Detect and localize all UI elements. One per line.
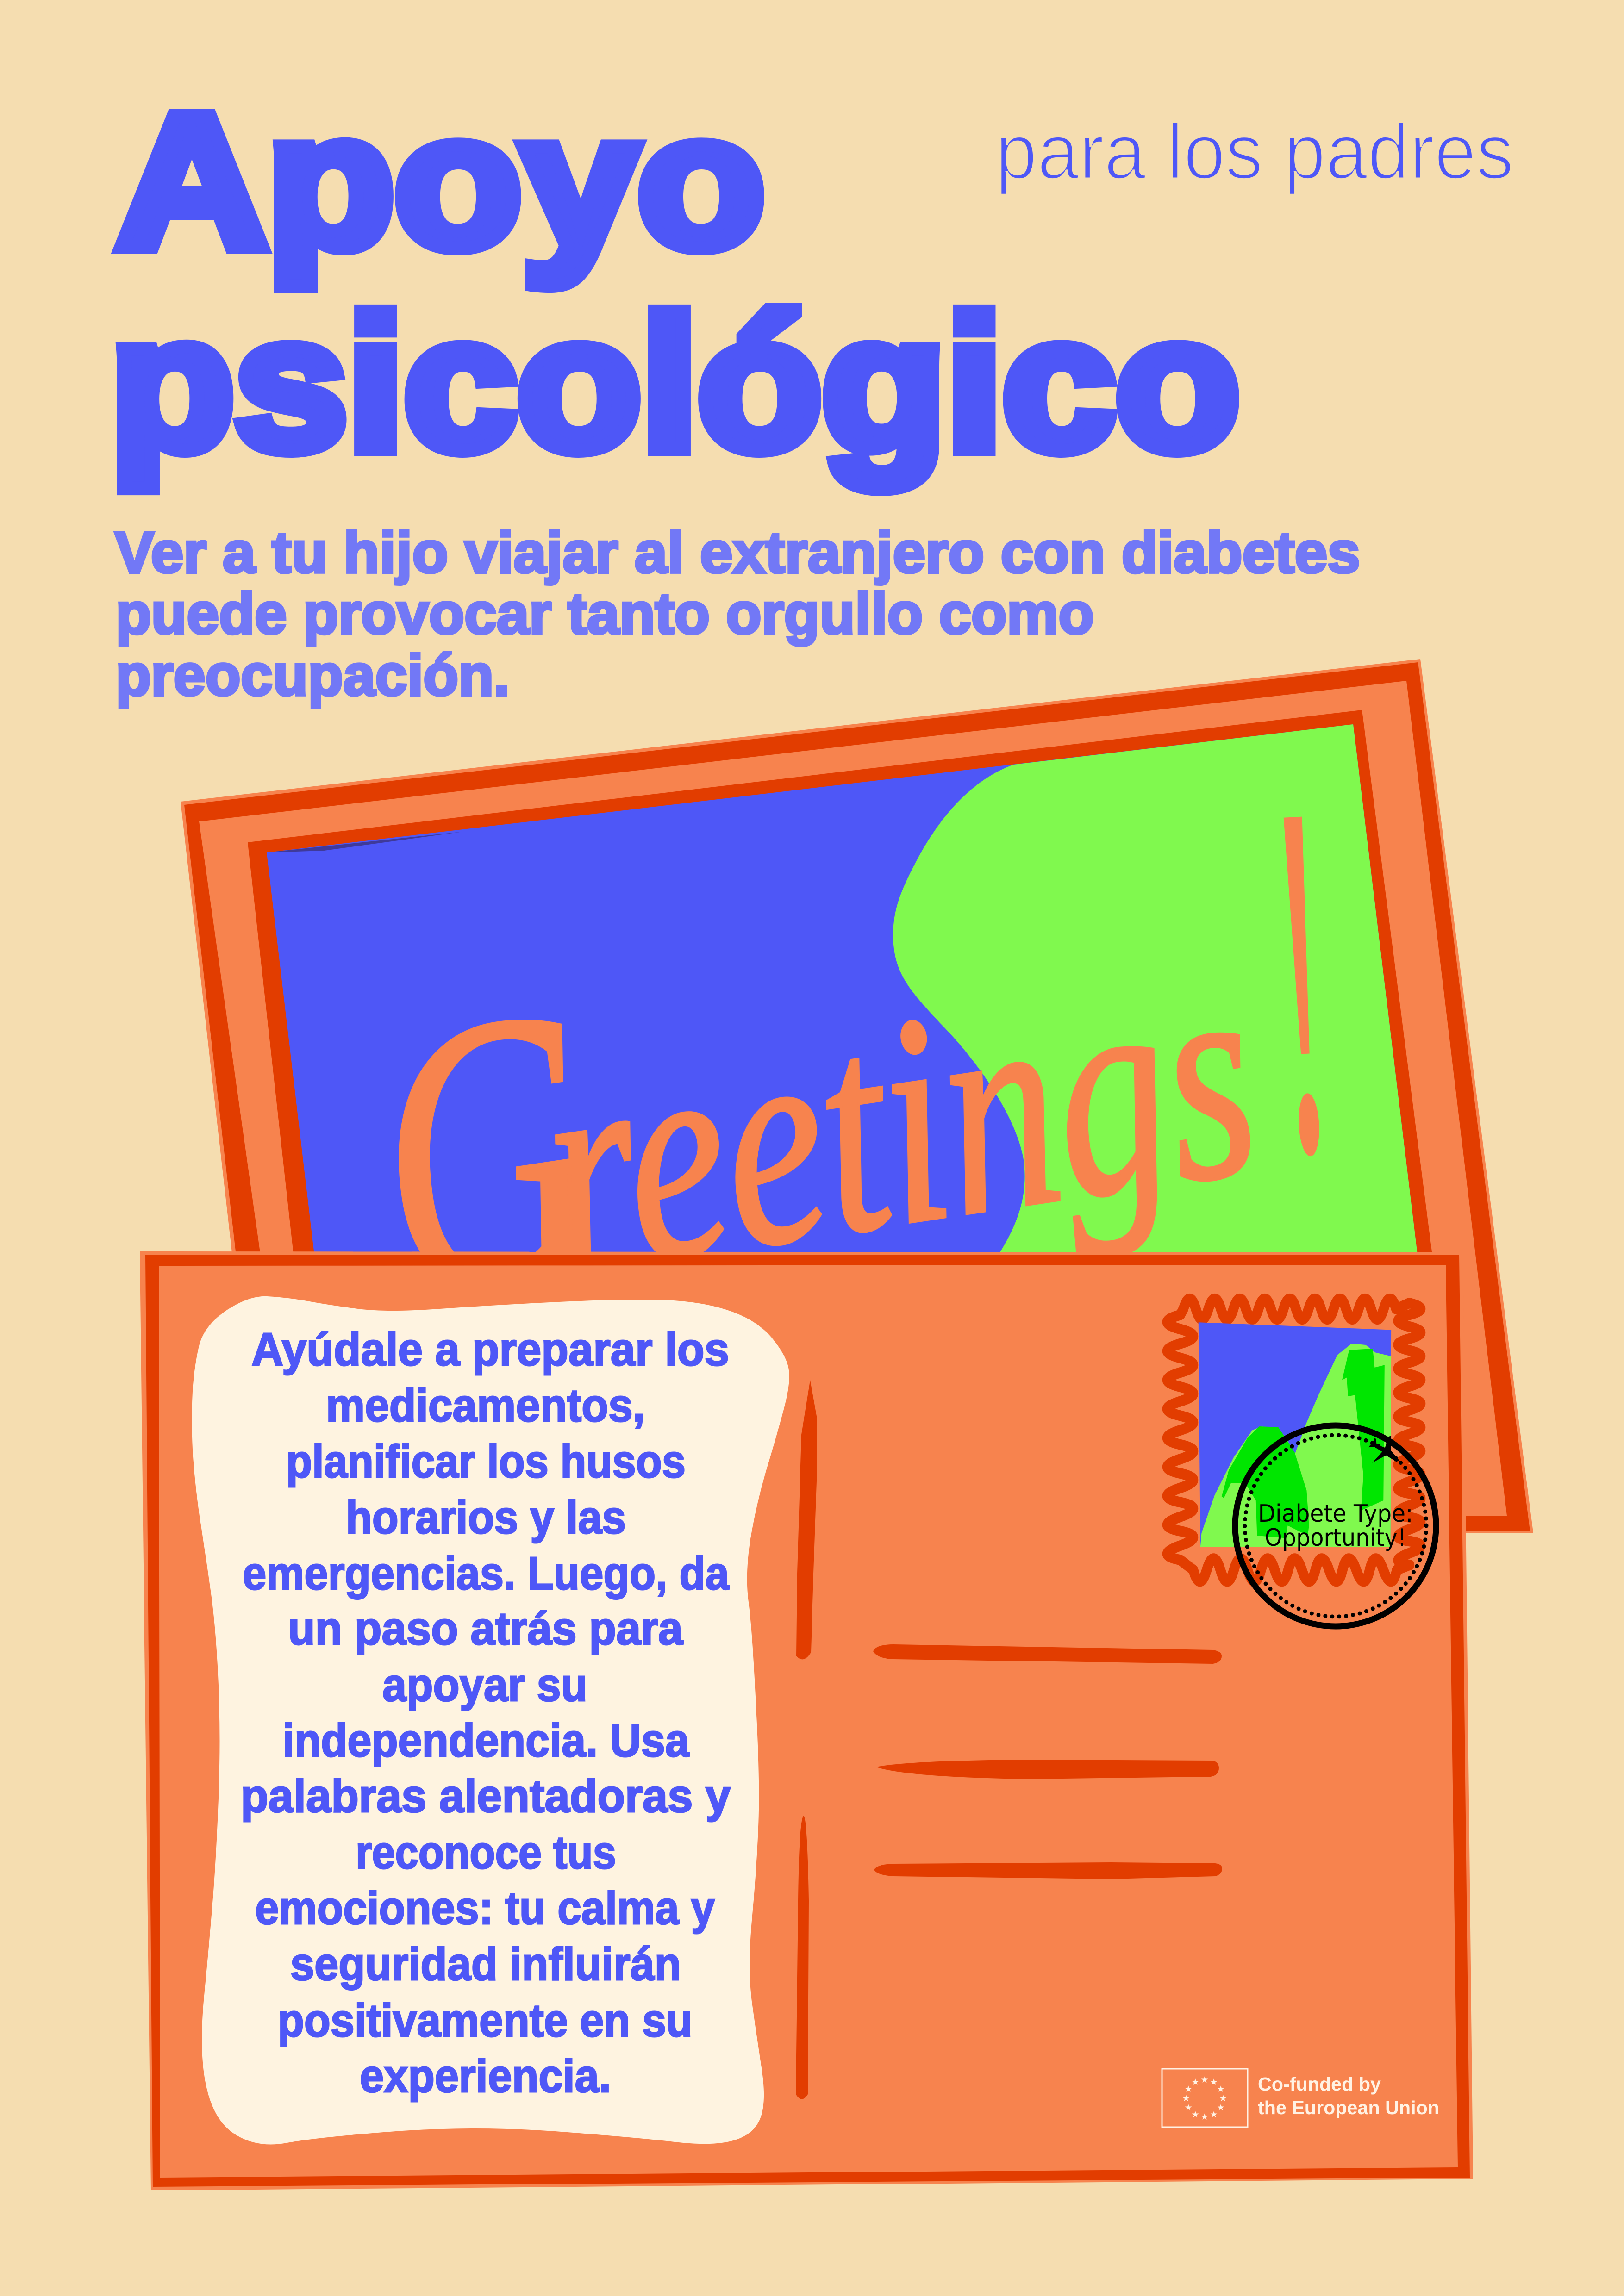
body text	[241, 1324, 731, 2102]
address lines	[873, 1644, 1222, 1879]
title: Apoyo	[117, 75, 765, 288]
postmark text: Opportunity!	[1265, 1524, 1406, 1552]
body text: un paso atrás para	[288, 1603, 683, 1655]
front postcard: address side	[140, 1251, 1473, 2190]
body text: horarios y las	[346, 1492, 626, 1543]
postage stamp	[1167, 1299, 1421, 1581]
lettering: Greetings!	[350, 700, 1343, 1381]
body text: seguridad influirán	[290, 1938, 681, 1990]
body text: positivamente en su	[278, 1995, 693, 2047]
lettering: Greetings!: !	[1260, 700, 1343, 1257]
message panel	[192, 1296, 789, 2145]
body text: experiencia.	[360, 2050, 611, 2102]
subtitle	[115, 521, 1360, 708]
divider strokes	[796, 1380, 817, 2099]
body text: reconoce tus	[356, 1827, 616, 1879]
EU flag outline with stars: ★★★★★★★★★★★★	[1182, 2075, 1227, 2122]
EU flag outline with stars	[1162, 2069, 1248, 2127]
body text: palabras alentadoras y	[241, 1770, 731, 1822]
postmark	[1235, 1425, 1436, 1626]
postmark text	[1258, 1500, 1413, 1552]
back postcard: Greetings picture side	[181, 659, 1533, 1541]
EU text: Co-funded by	[1258, 2073, 1381, 2095]
picture: green hill	[893, 724, 1418, 1259]
icon: airplane	[1368, 1436, 1399, 1463]
body text: apoyar su	[382, 1659, 587, 1711]
EU text	[1258, 2073, 1439, 2118]
title: psicológico	[110, 277, 1240, 491]
body text: emociones: tu calma y	[255, 1882, 715, 1934]
EU co-funded logo	[1162, 2069, 1439, 2127]
stamp: light green hills	[1200, 1344, 1391, 1547]
panel: cream blob	[192, 1296, 789, 2145]
body text: medicamentos,	[326, 1380, 645, 1431]
body text: independencia. Usa	[282, 1715, 690, 1767]
stamp: scalloped frame	[1167, 1299, 1421, 1581]
EU text: the European Union	[1258, 2097, 1439, 2118]
tagline: para los padres: para los padres	[995, 108, 1514, 196]
picture: blue sky	[267, 724, 1418, 1259]
lettering: Greetings!: Greetings	[350, 827, 1278, 1381]
subtitle: puede provocar tanto orgullo como	[116, 582, 1094, 646]
stamp: bright green brush marks	[1222, 1349, 1385, 1538]
subtitle: Ver a tu hijo viajar al extranjero con diabetes	[115, 521, 1360, 585]
postmark: rings	[1235, 1425, 1436, 1626]
body text: emergencias. Luego, da	[243, 1548, 730, 1599]
title	[110, 75, 1240, 491]
body text: planificar los husos	[286, 1436, 686, 1487]
body text: Ayúdale a preparar los	[251, 1324, 729, 1375]
postmark text: Diabete Type:	[1258, 1500, 1413, 1528]
subtitle: preocupación.	[116, 643, 510, 708]
stamp: sky	[1199, 1322, 1391, 1547]
